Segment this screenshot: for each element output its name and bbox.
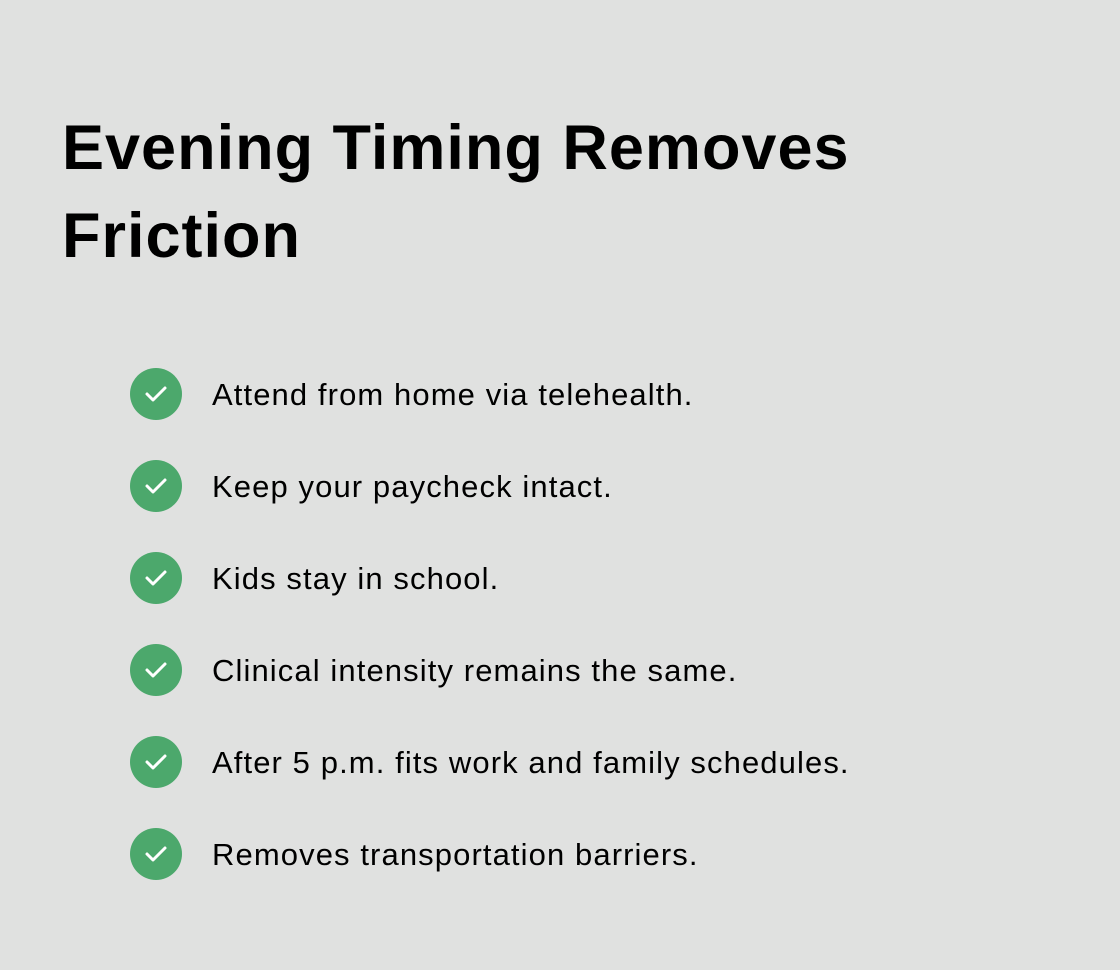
icon: check <box>130 828 182 880</box>
list item 6 <box>130 828 699 880</box>
text: Kids stay in school. <box>212 561 499 596</box>
icon: check <box>130 368 182 420</box>
text: Keep your paycheck intact. <box>212 469 613 504</box>
list item 4 <box>130 644 737 696</box>
text: Clinical intensity remains the same. <box>212 653 737 688</box>
list item 3 <box>130 552 499 604</box>
text: Attend from home via telehealth. <box>212 377 694 412</box>
title: Friction <box>62 201 301 271</box>
list item 1 <box>130 368 694 420</box>
icon: check <box>130 644 182 696</box>
icon: check <box>130 460 182 512</box>
title <box>62 113 850 271</box>
text: After 5 p.m. fits work and family schedules. <box>212 745 850 780</box>
icon: check <box>130 552 182 604</box>
list item 2 <box>130 460 613 512</box>
icon: check <box>130 736 182 788</box>
title: Evening Timing Removes <box>62 113 850 183</box>
text: Removes transportation barriers. <box>212 837 699 872</box>
list item 5 <box>130 736 850 788</box>
